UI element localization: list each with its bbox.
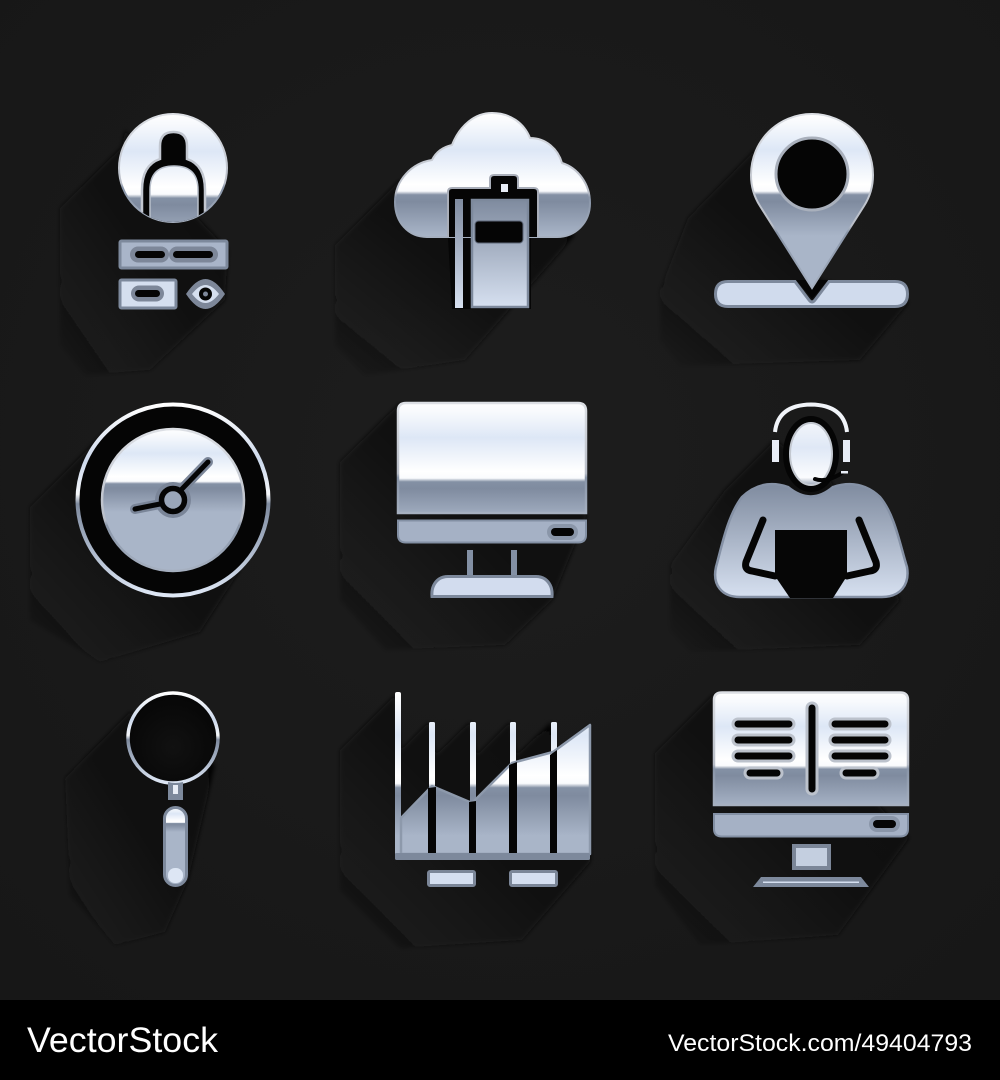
footer url text: VectorStock.com/49404793 — [668, 1030, 972, 1057]
icon: user profile with login fields — [76, 113, 228, 350]
area series — [401, 725, 590, 854]
footer band — [0, 1000, 1000, 1080]
icon: round clock — [30, 404, 268, 662]
icon: desktop monitor — [340, 403, 587, 650]
chart sticks — [429, 722, 557, 804]
icon: magnifying glass — [65, 693, 218, 945]
icon: map location pin — [660, 114, 909, 366]
icon: operator with headset — [670, 404, 908, 652]
text line halos — [738, 708, 885, 789]
icon: cloud with server door — [335, 113, 590, 375]
icon: area bar chart — [340, 692, 590, 948]
text lines — [738, 708, 885, 789]
footer logo text: VectorStock — [27, 1021, 219, 1060]
icon: monitor with open book — [655, 692, 909, 945]
black separators — [428, 750, 557, 854]
y axis — [395, 692, 401, 855]
